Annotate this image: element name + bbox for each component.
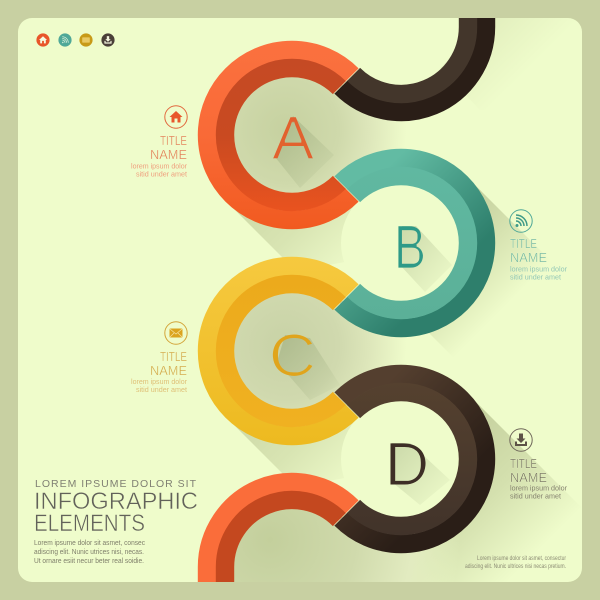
label C: NAME xyxy=(150,364,187,378)
curved ribbon ring chain xyxy=(207,18,486,582)
letter C with shadow xyxy=(269,322,340,400)
label A: sitid under amet xyxy=(136,170,187,178)
label D: NAME xyxy=(510,471,547,485)
icon: home xyxy=(165,106,187,128)
small icon: download xyxy=(101,33,115,47)
label D: sitid under amet xyxy=(510,492,561,500)
segment D brown xyxy=(341,374,486,544)
title name B: TITLE xyxy=(510,237,537,251)
heading: INFOGRAPHIC xyxy=(34,488,198,515)
label B xyxy=(510,210,568,282)
label B: lorem ipsum dolor xyxy=(510,264,568,274)
label A: NAME xyxy=(150,148,187,162)
small icon: mail xyxy=(79,33,93,47)
bottom-right note: Lorem ipsume dolor sit asmet, consectur xyxy=(477,556,566,562)
title name A: TITLE xyxy=(160,134,187,148)
long shadows and ring interiors xyxy=(234,18,566,582)
letter D with shadow xyxy=(385,430,450,505)
letter A with shadow xyxy=(272,104,334,188)
letter C with shadow: C xyxy=(269,322,316,389)
label A xyxy=(131,106,187,178)
main title block: Ut ornare esiit necur beter real soidie. xyxy=(34,558,144,565)
bottom orange segment xyxy=(207,482,352,582)
main title block: adiscing elit. Nunic utrices nisi, necas. xyxy=(34,549,144,556)
main title block: ELEMENTS xyxy=(34,510,145,537)
letter B with shadow xyxy=(394,213,452,292)
title name C: TITLE xyxy=(160,350,187,364)
label B: sitid under amet xyxy=(510,272,561,282)
label A: lorem ipsum dolor xyxy=(131,162,187,170)
top icon row xyxy=(36,33,115,47)
letter B with shadow: B xyxy=(394,213,426,281)
icon: rss xyxy=(510,210,532,232)
segment A orange xyxy=(207,50,352,220)
small icon: home xyxy=(36,33,50,47)
segment B teal xyxy=(341,158,486,328)
small icon: rss xyxy=(58,33,72,47)
bottom-right note xyxy=(465,556,566,570)
label B: NAME xyxy=(510,251,547,265)
segment C yellow xyxy=(207,266,352,436)
bottom-right note: adiscing elit. Nunic ultrices nisi necas pretium. xyxy=(465,564,566,570)
title name D: TITLE xyxy=(510,457,537,471)
description: Lorem ipsume dolor sit asmet, consec xyxy=(34,540,145,547)
top dark segment xyxy=(341,18,486,112)
label C: sitid under amet xyxy=(136,385,187,394)
label D xyxy=(510,429,568,500)
label C xyxy=(131,322,187,394)
icon: mail xyxy=(165,322,187,344)
icon: download xyxy=(510,429,532,451)
letter A with shadow: A xyxy=(272,104,314,172)
label C: lorem ipsum dolor xyxy=(131,377,187,386)
subtitle: LOREM IPSUME DOLOR SIT xyxy=(35,478,197,490)
letter D with shadow: D xyxy=(385,430,429,498)
label D: lorem ipsum dolor xyxy=(510,484,568,492)
main title block xyxy=(34,478,198,565)
